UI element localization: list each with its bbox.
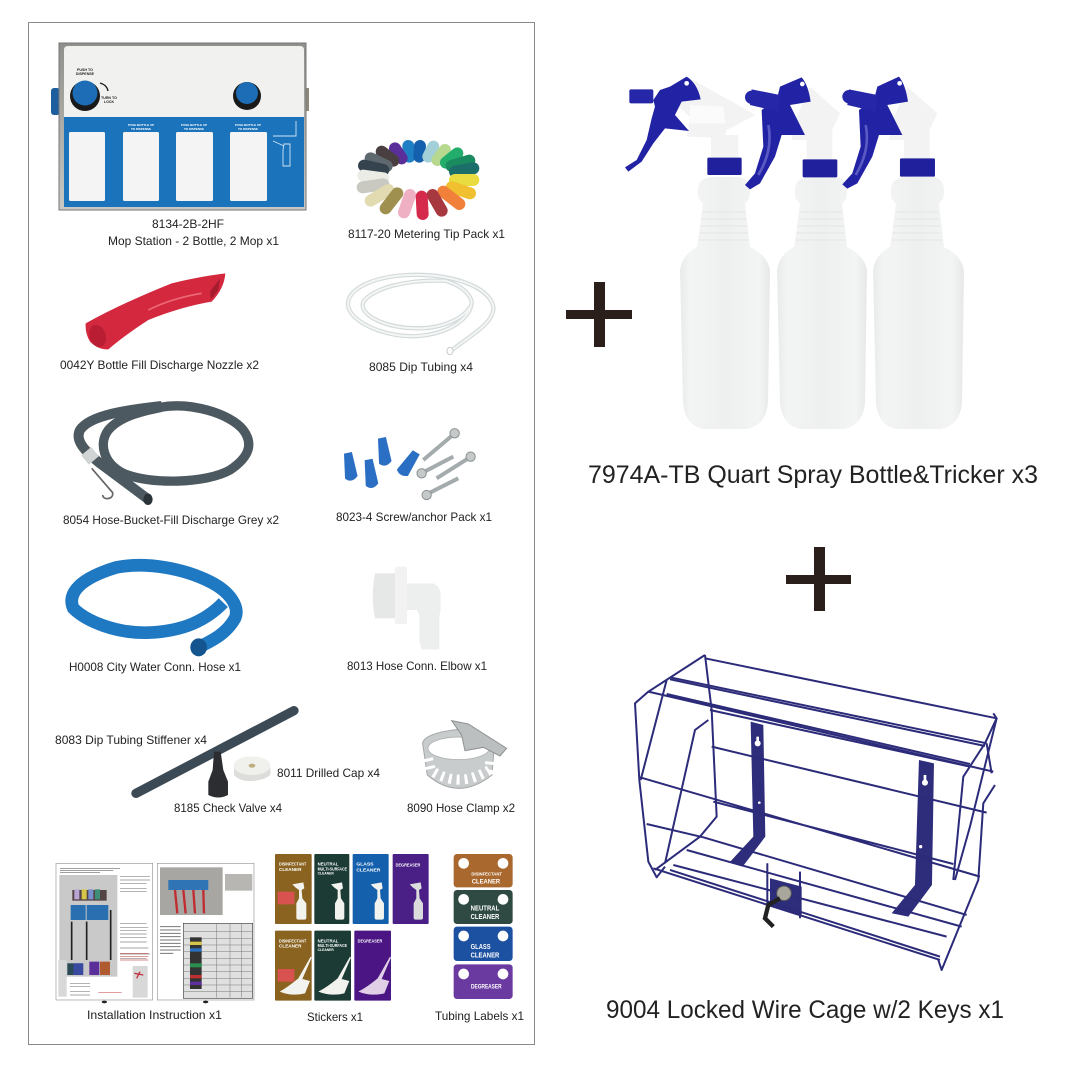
icon: tubing labels: CLEANER: [471, 950, 500, 959]
heading: wire cage label: 9004 Locked Wire Cage w/2 Keys x1: [606, 996, 1004, 1024]
icon: spray bottle 1: [625, 77, 770, 429]
icon: stickers: GLASS: [356, 862, 374, 868]
icon: stickers: NEUTRAL: [318, 862, 339, 867]
label: stiffener: 8083 Dip Tubing Stiffener x4: [55, 733, 207, 747]
icon: tubing labels: CLEANER: [472, 878, 501, 885]
label: mop station: 8134-2B-2HF: [152, 217, 224, 231]
label: installation instruction: Installation Instruction x1: [87, 1008, 222, 1022]
icon: stickers: DISINFECTANT: [279, 938, 307, 943]
label: blue hose: H0008 City Water Conn. Hose x1: [69, 660, 241, 674]
icon: metering tips ring: [363, 146, 473, 214]
icon: blue hose: [72, 565, 236, 656]
label: tubing labels: Tubing Labels x1: [435, 1009, 524, 1023]
icon: grey hose: [79, 406, 249, 505]
icon: spray bottle 2: [745, 77, 867, 429]
icon: stiffener, valve and cap: [136, 711, 294, 797]
label: check valve: 8185 Check Valve x4: [174, 801, 282, 815]
icon: stickers: DEGREASER: [396, 862, 421, 867]
label: hose clamp: 8090 Hose Clamp x2: [407, 801, 515, 815]
icon: mop station: DISPENSE: [76, 72, 95, 76]
icon: spray bottle 3: [842, 77, 964, 429]
label: screw pack: 8023-4 Screw/anchor Pack x1: [336, 510, 492, 524]
icon: mop station: TURN TO: [101, 96, 117, 100]
label: nozzle: 0042Y Bottle Fill Discharge Nozzle x2: [60, 358, 259, 372]
icon: screws and anchors: [343, 429, 475, 500]
label: stickers: Stickers x1: [307, 1010, 363, 1024]
icon: stickers: MULTI-SURFACE: [318, 866, 347, 871]
icon: mop station: PUSH BOTTLE UP: [235, 123, 261, 127]
icon: mop station: LOCK: [104, 100, 114, 104]
icon: plus sign bottom: [786, 547, 851, 611]
icon: mop station: PUSH TO: [77, 68, 93, 72]
label: grey hose: 8054 Hose-Bucket-Fill Discharge Grey x2: [63, 513, 279, 527]
icon: stickers: NEUTRAL: [318, 938, 339, 943]
icon: dip tubing: [348, 275, 493, 355]
icon: stickers: CLEANER: [279, 944, 302, 949]
icon: red nozzle: [86, 273, 225, 349]
label: mop station description: Mop Station - 2 Bottle, 2 Mop x1: [108, 234, 279, 248]
icon: locked wire cage: [635, 655, 997, 970]
icon: tubing labels: [454, 854, 513, 999]
heading: spray bottle label: 7974A-TB Quart Spray Bottle&Tricker x3: [588, 461, 1038, 489]
label: drilled cap: 8011 Drilled Cap x4: [277, 766, 380, 780]
icon: mop station: TO DISPENSE: [184, 127, 204, 131]
label: metering tip pack: 8117-20 Metering Tip Pack x1: [348, 227, 505, 241]
icon: mop station: TO DISPENSE: [238, 127, 258, 131]
icon: stickers: DEGREASER: [358, 938, 383, 943]
icon: plus sign top: [566, 282, 632, 347]
icon: hose elbow: [373, 567, 441, 649]
icon: stickers: [275, 854, 429, 1001]
icon: mop station: TO DISPENSE: [131, 127, 151, 131]
icon: installation instruction sheets: [56, 863, 254, 1003]
panel: parts list: [28, 22, 534, 1044]
icon: tubing labels: CLEANER: [471, 912, 500, 921]
icon: stickers: CLEANER: [279, 867, 302, 872]
icon: mop station: PUSH BOTTLE UP: [181, 123, 207, 127]
icon: stickers: CLEANER: [318, 871, 334, 875]
icon: tubing labels: DISINFECTANT: [471, 871, 502, 877]
icon: mop station: [51, 43, 309, 210]
label: hose elbow: 8013 Hose Conn. Elbow x1: [347, 659, 487, 673]
icon: stickers: CLEANER: [356, 868, 381, 874]
icon: tubing labels: NEUTRAL: [471, 904, 500, 913]
icon: tubing labels: GLASS: [471, 942, 491, 951]
icon: hose clamp: [423, 721, 507, 788]
label: dip tubing: 8085 Dip Tubing x4: [369, 360, 473, 374]
icon: mop station: PUSH BOTTLE UP: [128, 123, 154, 127]
icon: stickers: MULTI-SURFACE: [318, 943, 347, 948]
icon: tubing labels: DEGREASER: [471, 984, 502, 990]
icon: stickers: DISINFECTANT: [279, 862, 307, 867]
icon: stickers: CLEANER: [318, 948, 334, 952]
